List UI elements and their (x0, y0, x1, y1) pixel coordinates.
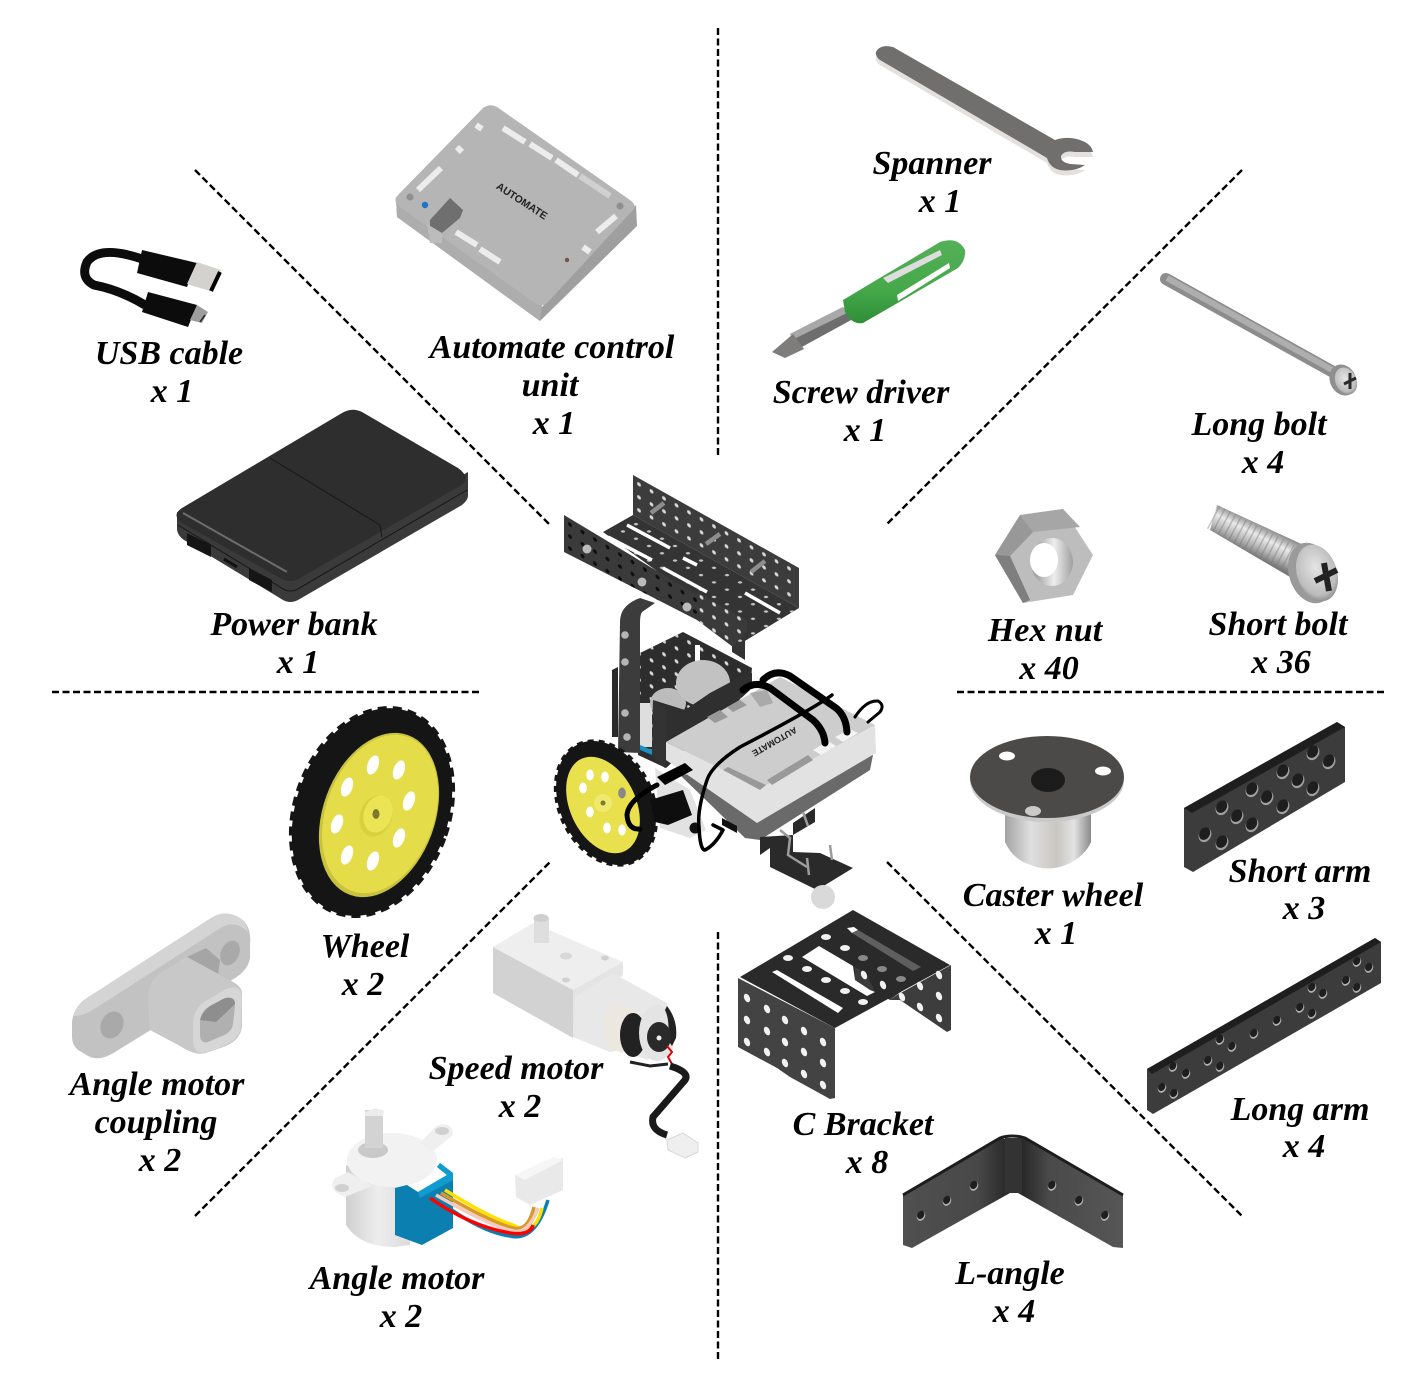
icon: coupling (72, 913, 250, 1058)
icon: screw driver (772, 240, 965, 358)
icon: angle motor (332, 1108, 563, 1247)
icon: hex nut (995, 509, 1093, 603)
label: x 1 (276, 644, 319, 681)
label: C Bracket (793, 1106, 933, 1143)
icon: USB cable (85, 250, 221, 327)
assembled robot (536, 475, 882, 909)
label: Short arm (1229, 853, 1371, 890)
item: Short arm (1184, 722, 1371, 927)
label: x 4 (1282, 1128, 1325, 1165)
robot: caster bracket (760, 808, 853, 909)
label: x 4 (992, 1293, 1035, 1330)
label: Speed motor (429, 1050, 603, 1087)
robot screen text: AUTOMATE (750, 725, 799, 758)
label: x 2 (341, 966, 384, 1003)
icon: long bolt (1166, 278, 1362, 400)
item: Automate control unit (395, 105, 675, 442)
item: Screw driver (772, 240, 965, 449)
label: Screw driver (773, 374, 949, 411)
item: Power bank (176, 410, 468, 681)
label: x 1 (843, 412, 886, 449)
icon: spanner (876, 46, 1093, 175)
label: x 2 (379, 1298, 422, 1335)
robot: gearbox under chassis (655, 768, 706, 838)
label: USB cable (95, 335, 243, 372)
item: Long arm (1147, 938, 1381, 1165)
robot: control unit (666, 677, 876, 840)
label: Short bolt (1209, 606, 1347, 643)
icon: long arm (1147, 938, 1381, 1114)
robot: upper bracket (564, 475, 799, 647)
label: x 40 (1018, 650, 1079, 687)
item: Caster wheel (963, 736, 1144, 952)
item: C Bracket (738, 910, 951, 1181)
item: USB cable (85, 250, 243, 410)
item: L-angle (903, 1136, 1123, 1330)
robot: vertical bracket (612, 607, 745, 737)
label: Caster wheel (963, 877, 1143, 914)
label: x 2 (498, 1088, 541, 1125)
label: x 36 (1250, 644, 1311, 681)
icon: short arm (1184, 722, 1345, 872)
robot: side bracket (618, 598, 655, 753)
item: Hex nut (987, 509, 1104, 687)
label: Angle motor (70, 1066, 244, 1103)
icon: power bank (176, 410, 468, 602)
robot: motor housing (638, 632, 752, 768)
icon: wheel (263, 685, 481, 939)
label: Automate control (430, 329, 674, 366)
icon: short bolt (1210, 505, 1345, 609)
label: x 1 (532, 405, 575, 442)
robot: wheel (536, 724, 676, 882)
label: x 1 (150, 373, 193, 410)
label: L-angle (955, 1255, 1065, 1292)
label: Angle motor (310, 1260, 484, 1297)
icon: caster wheel (970, 736, 1124, 868)
label: Hex nut (988, 612, 1102, 649)
icon: speed motor (493, 914, 698, 1158)
label: Spanner (872, 145, 992, 182)
item: Speed motor (429, 914, 698, 1158)
label: x 2 (138, 1142, 181, 1179)
label: Long bolt (1191, 406, 1327, 443)
label: x 8 (845, 1144, 888, 1181)
label: Long arm (1231, 1091, 1369, 1128)
label: x 1 (1034, 915, 1077, 952)
icon: control unit (395, 105, 637, 321)
label: coupling (95, 1104, 217, 1141)
item: Angle motor coupling (68, 913, 250, 1179)
device logo: AUTOMATE (494, 181, 549, 222)
item: Short bolt (1209, 505, 1349, 681)
item: Wheel (263, 685, 481, 1003)
icon: L-angle (903, 1136, 1123, 1248)
label: Wheel (321, 928, 409, 965)
robot: cables (627, 673, 882, 850)
label: Power bank (210, 606, 378, 643)
icon: C bracket (738, 910, 951, 1099)
label: x 4 (1241, 444, 1284, 481)
label: x 1 (918, 183, 961, 220)
item: Angle motor (308, 1108, 563, 1335)
label: unit (522, 367, 580, 404)
label: x 3 (1282, 890, 1325, 927)
item: Spanner (872, 46, 1093, 220)
item: Long bolt (1166, 278, 1362, 481)
